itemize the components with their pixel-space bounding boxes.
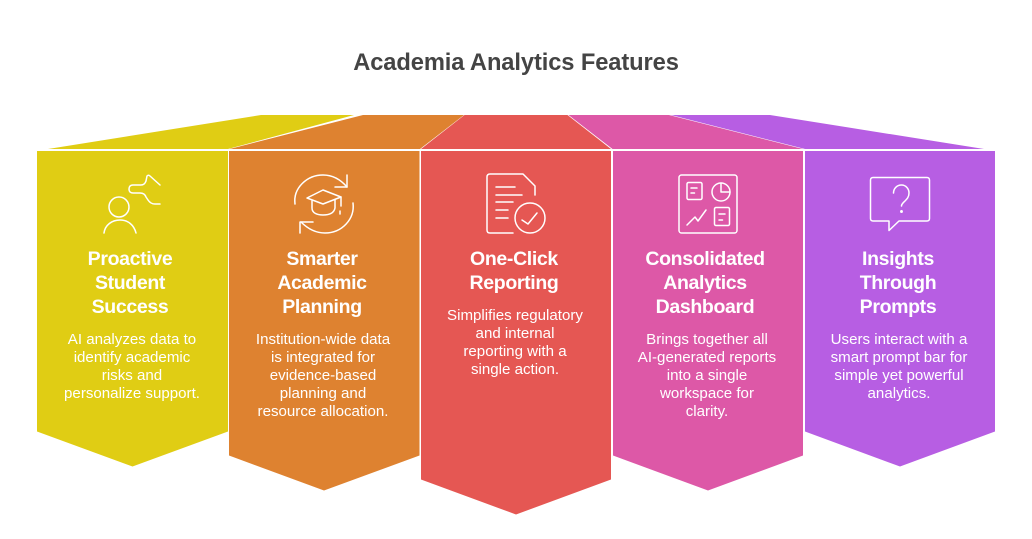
heading: Success [92, 296, 168, 318]
icon: report with check [487, 174, 545, 233]
body [64, 331, 200, 402]
panel text: Consolidated Analytics Dashboard [638, 248, 776, 420]
body: analytics. [868, 385, 930, 402]
panel shape: red [421, 115, 611, 514]
body: single action. [471, 361, 559, 378]
heading: Smarter [286, 248, 358, 270]
body: Institution-wide data [256, 331, 390, 348]
heading [860, 248, 936, 318]
heading: Academic [277, 272, 367, 294]
body: clarity. [686, 403, 728, 420]
panel text: Smarter Academic Planning [256, 248, 390, 420]
heading [277, 248, 367, 318]
body: is integrated for [271, 349, 375, 366]
icon: question speech bubble [870, 178, 930, 230]
body: evidence-based [270, 367, 376, 384]
heading: Insights [862, 248, 934, 270]
heading: Consolidated [645, 248, 765, 270]
body: into a single [667, 367, 747, 384]
panel shape: orange [229, 115, 464, 490]
heading: Prompts [860, 296, 936, 318]
body: AI analyzes data to [68, 331, 196, 348]
body: simple yet powerful [834, 367, 964, 384]
body: AI-generated reports [638, 349, 776, 366]
heading: Analytics [663, 272, 747, 294]
body: resource allocation. [258, 403, 388, 420]
icon: student with winding path [104, 175, 160, 233]
body [447, 307, 583, 378]
heading: Through [860, 272, 936, 294]
body: workspace for [660, 385, 754, 402]
panel shape: yellow [37, 115, 354, 466]
body: smart prompt bar for [831, 349, 967, 366]
panel text: One-Click Reporting [447, 248, 583, 378]
heading: Reporting [470, 272, 558, 294]
body: Brings together all [646, 331, 768, 348]
heading [645, 248, 765, 318]
body [831, 331, 968, 402]
body [256, 331, 390, 420]
heading: Student [95, 272, 165, 294]
heading: One-Click [470, 248, 558, 270]
body [638, 331, 776, 420]
title: Academia Analytics Features [353, 50, 679, 76]
body: Users interact with a [831, 331, 967, 348]
body: personalize support. [64, 385, 200, 402]
heading: Dashboard [656, 296, 754, 318]
icon: graduation cap in cycle [295, 175, 353, 233]
body: and internal [476, 325, 554, 342]
body: Simplifies regulatory [447, 307, 583, 324]
body: reporting with a [463, 343, 567, 360]
panel shape: pink [568, 115, 803, 490]
body: planning and [280, 385, 366, 402]
icon: dashboard [679, 175, 737, 233]
heading [88, 248, 172, 318]
panel text: Insights Through Prompts [831, 248, 968, 402]
body: risks and [102, 367, 162, 384]
panel text: Proactive Student Success [64, 248, 200, 402]
heading: Planning [282, 296, 362, 318]
heading: Proactive [88, 248, 172, 270]
body: identify academic [74, 349, 190, 366]
heading [470, 248, 558, 294]
panel shape: purple [671, 115, 995, 466]
